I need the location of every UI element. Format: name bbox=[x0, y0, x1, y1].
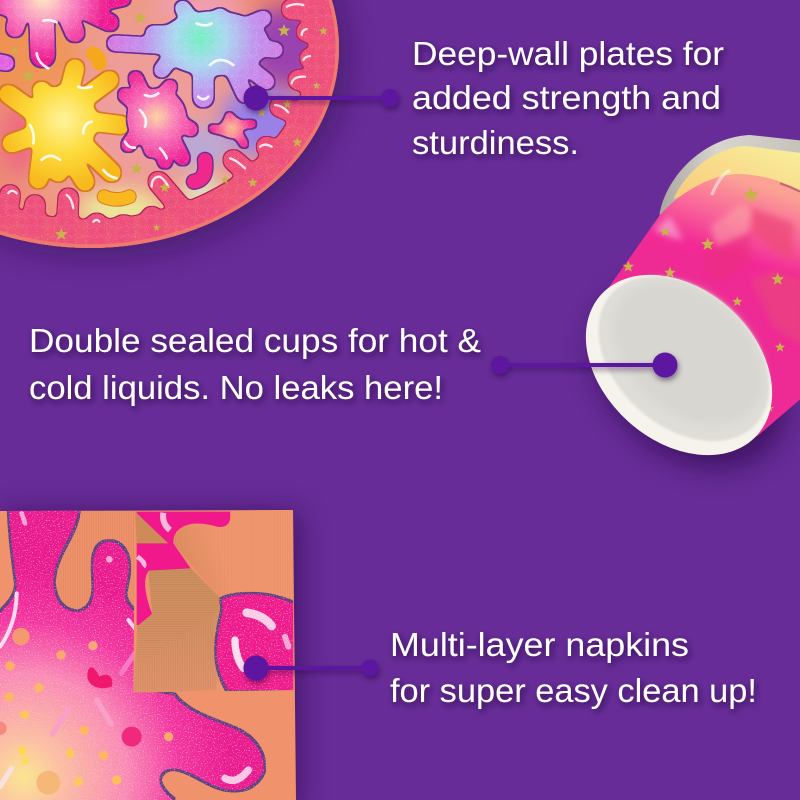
cup lid rim bbox=[659, 135, 800, 215]
callout: napkin bbox=[244, 656, 378, 680]
cup base bbox=[550, 238, 800, 492]
text: plate feature: added strength and bbox=[412, 79, 721, 116]
cup stars bbox=[623, 186, 785, 412]
text: plate feature: sturdiness. bbox=[412, 124, 579, 161]
splat: small pink bbox=[212, 116, 253, 144]
text: plate feature bbox=[412, 35, 724, 161]
highlights on drips bbox=[8, 4, 310, 222]
napkin highlights bbox=[0, 513, 248, 780]
callout: cup bbox=[491, 352, 678, 378]
fold pink band bbox=[137, 512, 230, 625]
napkin pink blob bbox=[0, 510, 264, 800]
callout: plate bbox=[244, 86, 399, 110]
panel: napkin bbox=[0, 507, 300, 800]
border drips bbox=[0, 0, 333, 240]
splat: top left pink bbox=[0, 0, 123, 63]
napkin fold bbox=[132, 508, 295, 695]
napkin sprinkles bbox=[0, 628, 173, 795]
stars on plate bbox=[11, 11, 328, 240]
text: napkin feature: Multi-layer napkins bbox=[390, 626, 689, 663]
fold pink blob bbox=[217, 594, 293, 690]
text: napkin feature bbox=[390, 626, 757, 709]
splat: teal lavender bbox=[115, 8, 275, 97]
fold flap bbox=[133, 568, 226, 693]
beans bbox=[93, 54, 205, 199]
splat highlights bbox=[30, 20, 233, 178]
text: cup feature: Double sealed cups for hot & bbox=[29, 322, 481, 359]
panel: paper plate bbox=[0, 0, 349, 258]
text: cup feature bbox=[29, 322, 481, 406]
text: plate feature: Deep-wall plates for bbox=[412, 35, 724, 72]
splat: pink centre bbox=[125, 78, 191, 162]
cup body bbox=[603, 174, 800, 437]
fold corner tab bbox=[135, 512, 168, 543]
text: napkin feature: for super easy clean up! bbox=[390, 672, 757, 709]
panel: paper cup bbox=[550, 135, 800, 507]
text: cup feature: cold liquids. No leaks here! bbox=[29, 369, 443, 406]
cup patches bbox=[653, 170, 800, 347]
splat: yellow bbox=[8, 68, 121, 182]
cup yellow band bbox=[673, 146, 800, 199]
